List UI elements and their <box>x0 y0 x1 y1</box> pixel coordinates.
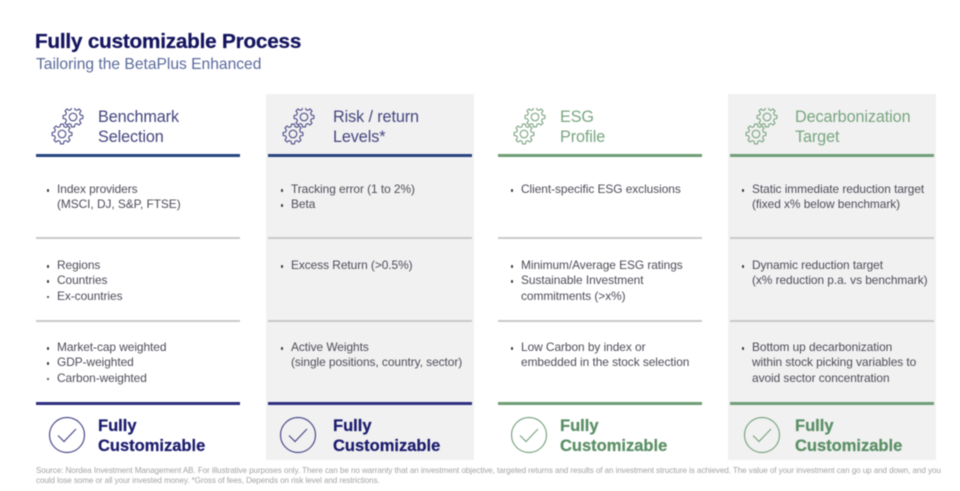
column: benchmark selection <box>35 107 241 455</box>
list: regions <box>46 258 123 303</box>
list: weighting: Carbon-weighted <box>57 371 147 385</box>
divider <box>268 320 472 322</box>
divider <box>498 237 702 239</box>
divider <box>730 237 934 239</box>
title: Fully customizable Process <box>35 30 301 53</box>
label: fully customizable: Customizable <box>560 437 667 455</box>
list: active weights: Active Weights <box>291 340 369 354</box>
header rule <box>268 154 472 157</box>
list: static target: (fixed x% below benchmark) <box>752 197 900 211</box>
heading: esg profile <box>560 108 606 146</box>
heading: decarbonization target: Decarbonization <box>795 108 910 126</box>
column: esg profile <box>497 108 703 455</box>
heading: decarbonization target: Target <box>795 128 839 146</box>
label: fully customizable: Fully <box>98 417 137 435</box>
list: esg ratings <box>510 258 683 304</box>
list: regions: Countries <box>57 273 107 287</box>
list: esg ratings: Minimum/Average ESG ratings <box>521 258 683 272</box>
footnote <box>36 466 941 485</box>
panel: decarbonization background <box>728 94 936 460</box>
list: active weights: (single positions, country, sector) <box>291 355 462 369</box>
divider <box>730 320 934 322</box>
divider <box>36 320 240 322</box>
heading: esg profile: Profile <box>560 128 605 146</box>
bottom rule <box>498 402 702 405</box>
heading: risk return levels: Risk / return <box>333 108 419 126</box>
list: active weights <box>280 340 462 370</box>
icon: check circle <box>510 416 548 454</box>
header rule <box>36 154 240 157</box>
header rule <box>498 154 702 157</box>
list: static target: Static immediate reduction target <box>752 182 924 196</box>
column: decarbonization target <box>729 108 935 455</box>
divider <box>498 320 702 322</box>
label: fully customizable: Fully <box>560 417 599 435</box>
subtitle: Tailoring the BetaPlus Enhanced <box>36 56 261 73</box>
heading: risk return levels: Levels* <box>333 128 385 146</box>
heading: benchmark selection <box>98 108 180 146</box>
list: regions: Ex-countries <box>57 289 122 303</box>
label: fully customizable <box>794 417 902 455</box>
label: fully customizable: Customizable <box>98 437 205 455</box>
panel: risk return background <box>266 94 474 460</box>
icon: check circle <box>743 416 781 454</box>
column: risk return levels <box>267 107 473 455</box>
header rule <box>730 154 934 157</box>
list: index providers: Index providers <box>57 182 138 196</box>
list: dynamic target <box>741 258 928 287</box>
list: static target <box>741 182 925 211</box>
list: index providers <box>46 182 181 212</box>
label: fully customizable <box>98 417 206 455</box>
icon: check circle <box>279 416 317 454</box>
heading: esg profile: ESG <box>560 108 594 126</box>
icon: gears <box>512 108 546 146</box>
heading: benchmark selection: Benchmark <box>98 108 179 126</box>
list: bottom up <box>741 340 916 385</box>
list: dynamic target: Dynamic reduction target <box>752 258 883 272</box>
list: low carbon <box>510 340 690 369</box>
bottom rule <box>268 402 472 405</box>
divider <box>268 237 472 239</box>
list: excess return: Excess Return (>0.5%) <box>291 258 413 272</box>
heading: benchmark selection: Selection <box>98 128 164 146</box>
icon: gears <box>50 107 84 146</box>
bottom rule <box>730 402 934 405</box>
list: tracking error: Beta <box>291 197 315 211</box>
icon: gears <box>282 107 316 146</box>
icon: check circle <box>48 416 86 454</box>
list: bottom up: Bottom up decarbonization <box>752 340 892 354</box>
list: weighting: Market-cap weighted <box>57 340 166 354</box>
list: weighting: GDP-weighted <box>57 355 134 369</box>
heading: decarbonization target <box>794 108 910 146</box>
list: exclusions: Client-specific ESG exclusions <box>521 182 681 196</box>
list: esg ratings: commitments (>x%) <box>521 289 626 303</box>
list: esg ratings: Sustainable Investment <box>521 273 644 287</box>
bottom rule <box>36 402 240 405</box>
list: bottom up: within stock picking variables to <box>752 355 916 369</box>
label: fully customizable: Customizable <box>333 437 440 455</box>
heading: risk return levels <box>333 108 419 146</box>
list: tracking error: Tracking error (1 to 2%) <box>291 182 415 196</box>
divider <box>36 237 240 239</box>
label: fully customizable: Customizable <box>795 437 902 455</box>
list: low carbon: embedded in the stock selection <box>521 355 689 369</box>
list: dynamic target: (x% reduction p.a. vs benchmark) <box>752 273 928 287</box>
label: fully customizable: Fully <box>333 417 372 435</box>
list: regions: Regions <box>57 258 100 272</box>
list: bottom up: avoid sector concentration <box>752 371 890 385</box>
icon: gears <box>744 108 778 146</box>
label: fully customizable <box>332 417 441 455</box>
list: index providers: (MSCI, DJ, S&P, FTSE) <box>57 197 181 211</box>
footnote: Source: Nordea Investment Management AB. For illustrative purposes only. There can be no warranty that an investment objective, targeted returns and results of an investment structure is achieved. The value of your investment can go up and down, and you <box>36 466 941 475</box>
label: fully customizable <box>560 417 668 455</box>
label: fully customizable: Fully <box>795 417 834 435</box>
footnote: could lose some or all your invested money. *Gross of fees, Depends on risk level and restrictions. <box>36 476 380 485</box>
list: weighting <box>46 340 166 386</box>
list: low carbon: Low Carbon by index or <box>521 340 645 354</box>
list: tracking error <box>280 182 415 211</box>
